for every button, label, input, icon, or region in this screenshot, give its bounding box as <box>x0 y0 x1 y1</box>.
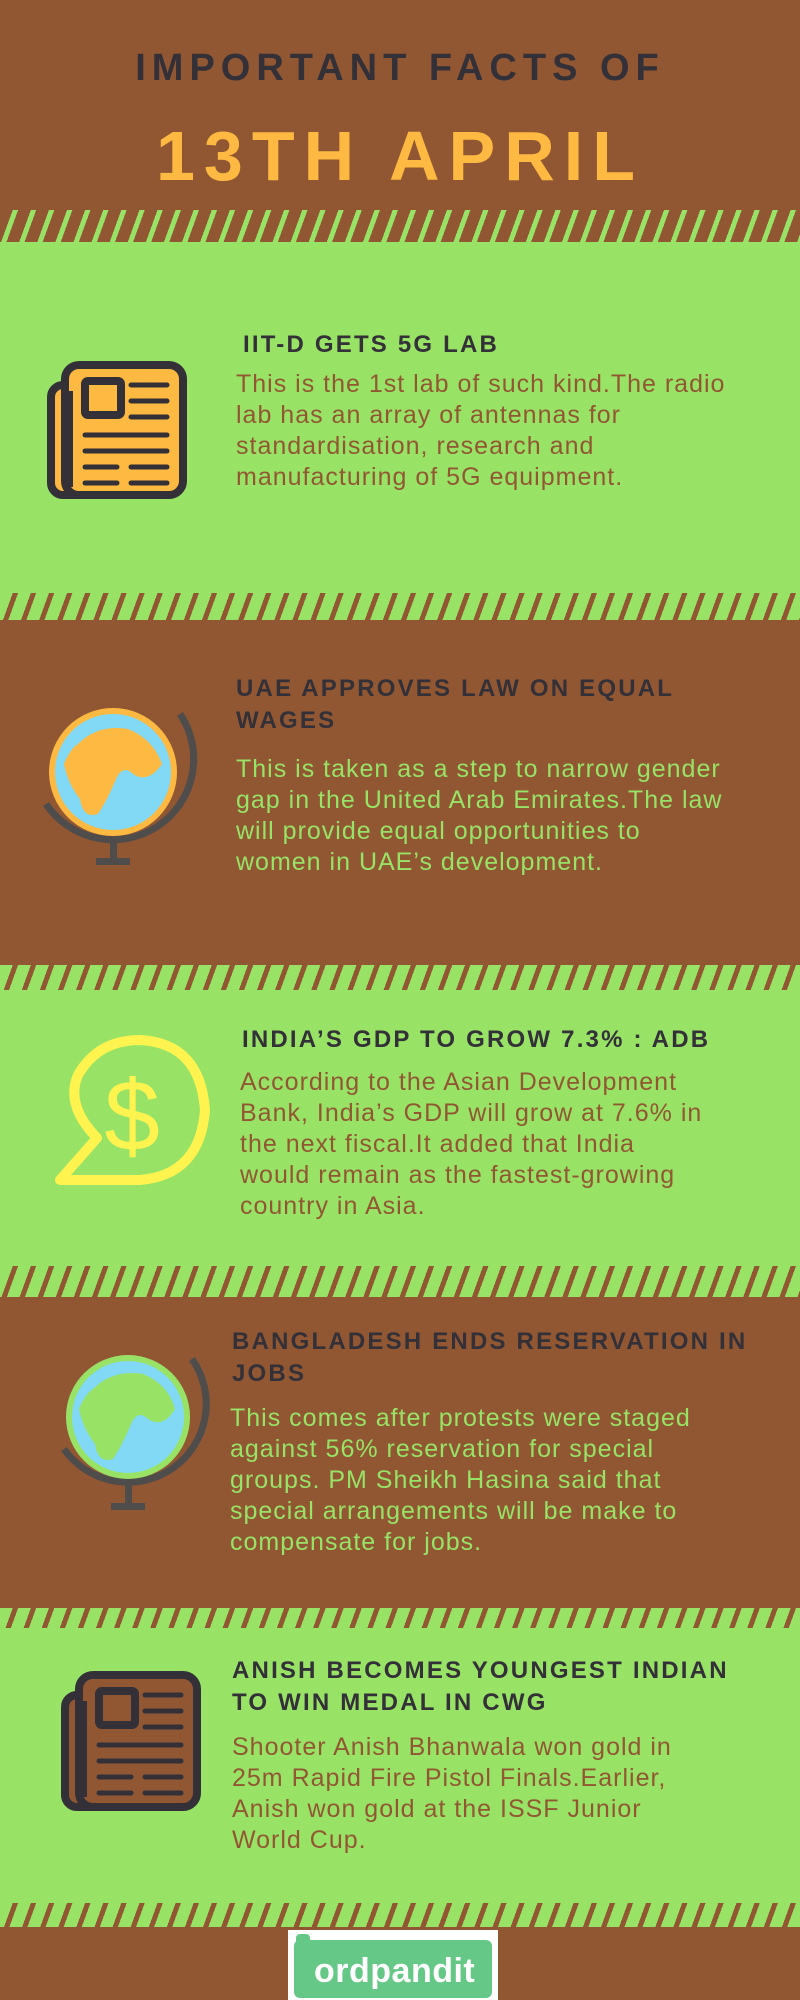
body text <box>236 370 725 491</box>
heading <box>236 675 674 734</box>
body text: lab has an array of antennas for <box>236 401 621 429</box>
body text: standardisation, research and <box>236 432 594 460</box>
body text: would remain as the fastest-growing <box>240 1161 675 1189</box>
panel: India GDP <box>0 990 800 1266</box>
body text: special arrangements will be make to <box>230 1497 677 1525</box>
panel: Bangladesh reservation <box>0 1297 800 1608</box>
icon: newspaper <box>47 361 187 499</box>
heading <box>232 1328 747 1387</box>
body text: country in Asia. <box>240 1192 426 1220</box>
heading: ANISH BECOMES YOUNGEST INDIAN <box>232 1657 729 1684</box>
body text: the next fiscal.It added that India <box>240 1130 635 1158</box>
body text <box>240 1068 702 1220</box>
heading: TO WIN MEDAL IN CWG <box>232 1689 548 1716</box>
body text: compensate for jobs. <box>230 1528 482 1556</box>
icon: globe blue <box>61 1355 210 1510</box>
date heading: 13TH APRIL <box>156 117 644 195</box>
body text: will provide equal opportunities to <box>236 817 641 845</box>
panel: UAE equal wages <box>0 620 800 965</box>
body text: Shooter Anish Bhanwala won gold in <box>232 1733 672 1761</box>
body text: gap in the United Arab Emirates.The law <box>236 786 722 814</box>
heading: BANGLADESH ENDS RESERVATION IN <box>232 1328 747 1355</box>
icon: dollar bubble: $ <box>104 1060 160 1172</box>
heading: INDIA’S GDP TO GROW 7.3% : ADB <box>242 1026 710 1053</box>
body text: Anish won gold at the ISSF Junior <box>232 1795 642 1823</box>
body text: Bank, India’s GDP will grow at 7.6% in <box>240 1099 702 1127</box>
heading <box>232 1657 729 1716</box>
heading: WAGES <box>236 707 336 734</box>
body text <box>232 1733 672 1854</box>
icon: globe orange <box>43 708 198 865</box>
body text <box>230 1404 691 1556</box>
heading: IIT-D GETS 5G LAB <box>243 331 499 358</box>
heading: JOBS <box>232 1360 306 1387</box>
icon: dollar bubble <box>55 1035 210 1185</box>
body text: This is the 1st lab of such kind.The radio <box>236 370 725 398</box>
body text: This comes after protests were staged <box>230 1404 691 1432</box>
body text: According to the Asian Development <box>240 1068 677 1096</box>
body text: against 56% reservation for special <box>230 1435 654 1463</box>
panel: Anish medal <box>0 1628 800 1905</box>
icon: newspaper brown <box>61 1671 201 1811</box>
body text: groups. PM Sheikh Hasina said that <box>230 1466 661 1494</box>
panel: IIT-D 5G lab <box>0 242 800 593</box>
header panel <box>0 0 800 212</box>
logo: wordpandit <box>288 1930 498 2000</box>
body text: This is taken as a step to narrow gender <box>236 755 721 783</box>
body text: women in UAE’s development. <box>236 848 603 876</box>
heading: UAE APPROVES LAW ON EQUAL <box>236 675 674 702</box>
body text: manufacturing of 5G equipment. <box>236 463 623 491</box>
title: IMPORTANT FACTS OF <box>135 47 665 89</box>
body text: World Cup. <box>232 1826 367 1854</box>
body text <box>236 755 722 876</box>
body text: 25m Rapid Fire Pistol Finals.Earlier, <box>232 1764 666 1792</box>
logo: wordpandit: ordpandit <box>314 1952 475 1990</box>
